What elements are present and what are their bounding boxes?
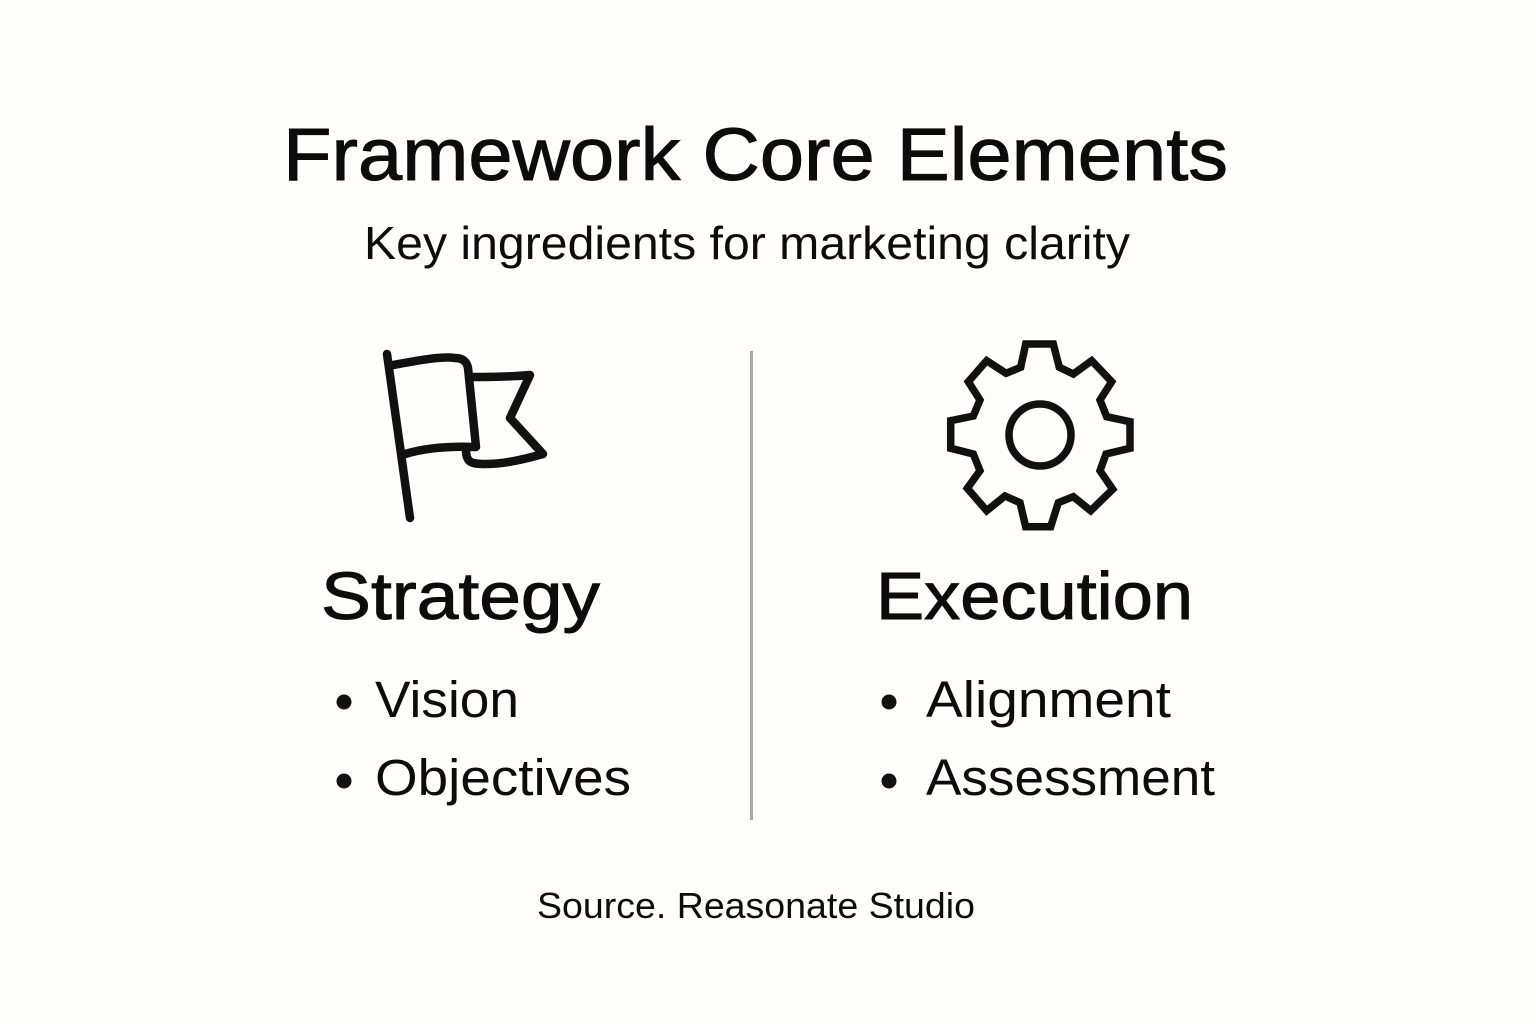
- bullet: vision: [336, 694, 352, 710]
- panel: strategy: [321, 354, 631, 806]
- bullet: alignment: [882, 694, 896, 710]
- item: vision: Vision: [375, 671, 519, 728]
- source note: Source. Reasonate Studio: [537, 885, 975, 926]
- list: execution items: [882, 671, 1215, 806]
- bullet: assessment: [882, 774, 896, 788]
- title: Framework Core Elements: [283, 113, 1228, 196]
- heading: execution: Execution: [876, 559, 1193, 634]
- heading: strategy: Strategy: [321, 559, 601, 634]
- panel: execution: [876, 344, 1215, 806]
- list: strategy items: [336, 671, 631, 806]
- bullet: objectives: [336, 774, 352, 788]
- icon: flag: [387, 354, 543, 518]
- divider: [750, 351, 753, 820]
- item: assessment: Assessment: [926, 749, 1215, 806]
- item: alignment: Alignment: [926, 671, 1171, 728]
- icon: gear: [951, 344, 1130, 527]
- subtitle: Key ingredients for marketing clarity: [364, 217, 1130, 269]
- item: objectives: Objectives: [375, 749, 631, 806]
